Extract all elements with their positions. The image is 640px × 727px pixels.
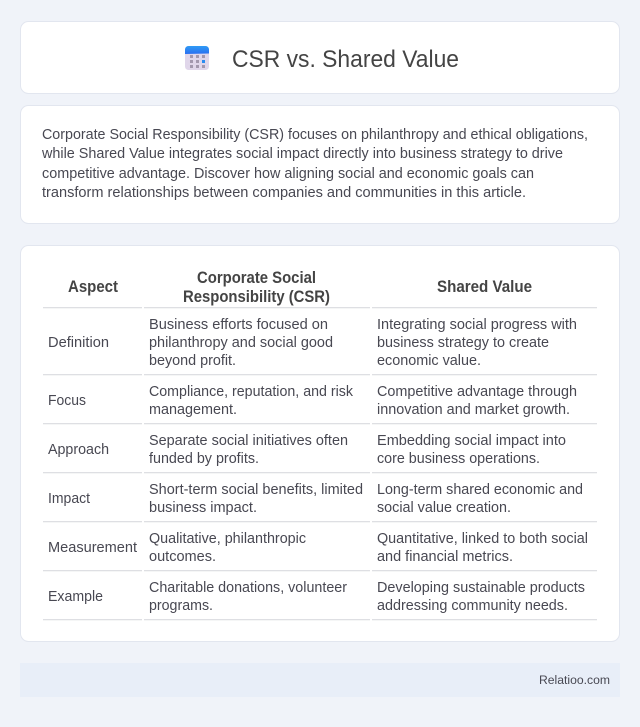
icon: calendar [185,46,209,70]
footer [20,663,620,697]
text block: introduction [41,127,588,201]
text block: introduction: Corporate Social Responsibility (CSR) focuses on philanthropy and ethical obligations, [42,127,588,143]
row: definition: beyond profit. [149,353,236,369]
title: CSR vs. Shared Value [232,46,459,73]
row: example [48,580,585,614]
row: measurement: and financial metrics. [377,549,513,565]
row: focus: management. [149,402,237,418]
table header row: Responsibility (CSR) [183,288,330,306]
text block: introduction: transform relationships between companies and communities in this article. [42,185,526,201]
panel: header [20,22,620,94]
row: example: Developing sustainable products [377,580,585,596]
row: focus: Focus [48,393,86,409]
row: focus: innovation and market growth. [377,402,570,418]
row: example: programs. [149,598,213,614]
row: measurement: Qualitative, philanthropic [149,531,306,547]
footer source text: Relatioo.com [539,673,610,687]
row: measurement [48,531,588,565]
row: definition: economic value. [377,353,481,369]
row: definition [48,317,577,369]
row: example: addressing community needs. [377,598,568,614]
row: approach: Embedding social impact into [377,433,566,449]
row: approach: core business operations. [377,451,540,467]
row: example: Charitable donations, volunteer [149,580,347,596]
table header row: Aspect [68,278,118,296]
row: definition: business strategy to create [377,335,549,351]
row: focus [48,384,577,418]
row: impact [48,482,583,516]
row: measurement: outcomes. [149,549,216,565]
row: definition: Definition [48,335,109,351]
row: impact: business impact. [149,500,257,516]
row: example: Example [48,589,103,605]
row: definition: Business efforts focused on [149,317,328,333]
row: impact: social value creation. [377,500,511,516]
row: approach: Approach [48,442,109,458]
row: definition: philanthropy and social good [149,335,333,351]
row: impact: Short-term social benefits, limited [149,482,363,498]
row: impact: Long-term shared economic and [377,482,583,498]
text block: introduction: competitive advantage. Discover how aligning social and economic goals can [42,166,534,182]
row: measurement: Measurement [48,540,137,556]
row: focus: Compliance, reputation, and risk [149,384,354,400]
row: focus: Competitive advantage through [377,384,577,400]
row: definition: Integrating social progress with [377,317,577,333]
table header row: Corporate Social [197,269,316,287]
table header row [68,269,532,306]
table header row: Shared Value [437,278,532,296]
row: approach: funded by profits. [149,451,259,467]
text block: introduction: while Shared Value integrates social impact directly into business strategy to drive [41,146,563,162]
row: measurement: Quantitative, linked to both social [377,531,588,547]
row: approach [48,433,566,467]
row: impact: Impact [48,491,90,507]
panel: comparison table [20,246,620,642]
panel: introduction [20,106,620,224]
row: approach: Separate social initiatives often [149,433,348,449]
